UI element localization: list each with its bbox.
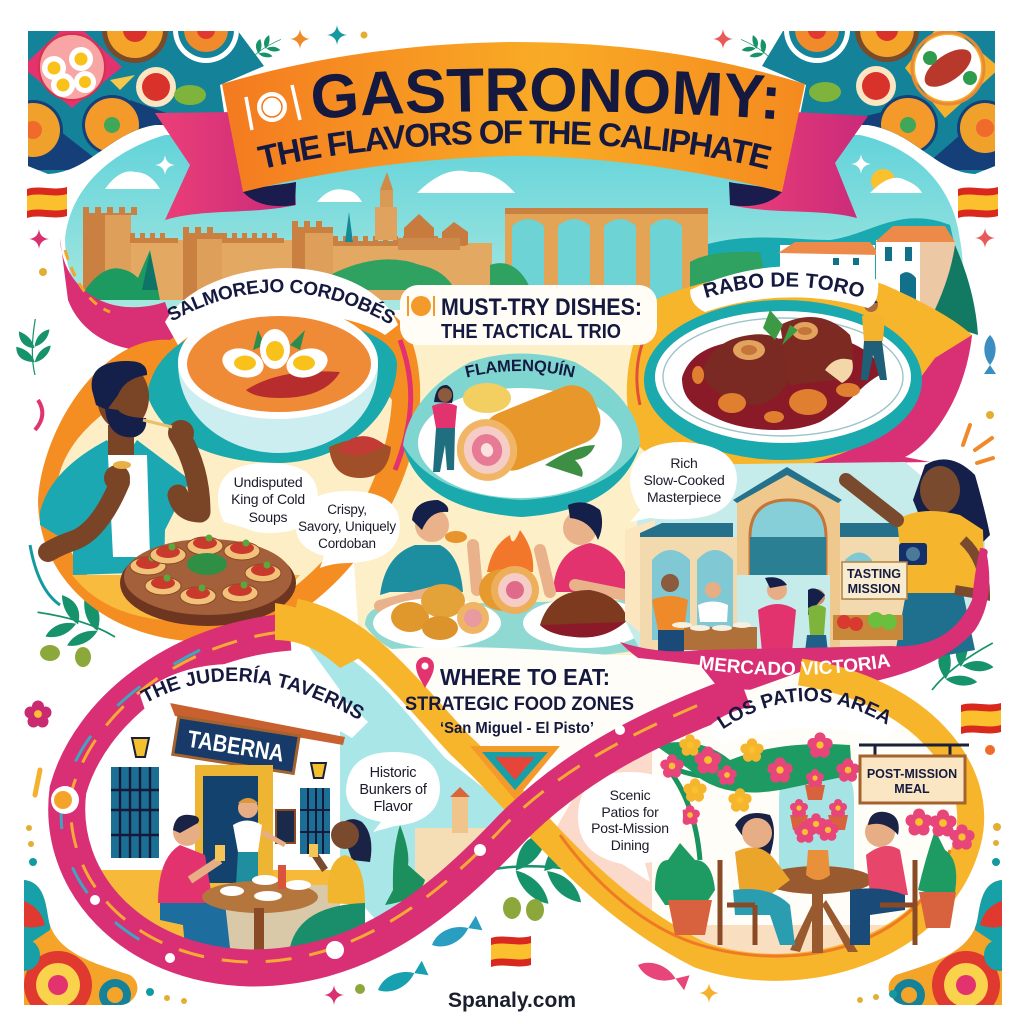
sky [65, 135, 963, 310]
callout [296, 491, 400, 568]
plate [655, 311, 911, 443]
icon: plate [408, 296, 434, 316]
soup [187, 316, 371, 412]
icon: plate and cutlery [246, 85, 300, 130]
man at table [158, 815, 230, 948]
panel: bottom-left corner tiles [24, 880, 138, 1005]
callout: Cordoban [318, 536, 376, 551]
man left [380, 500, 477, 606]
yellow ribbon [627, 272, 972, 467]
man eating [40, 361, 200, 575]
title banner: GASTRONOMY: [313, 68, 776, 119]
icon: grilled meat plate [912, 32, 984, 104]
vase and flowers [794, 813, 839, 880]
callout: Patios for [601, 804, 659, 820]
panel: where-to-eat backing [378, 647, 720, 760]
oxtail stew [682, 310, 880, 430]
potted plant right [906, 808, 975, 928]
Los Patios Area label: LOS PATIOS AREA [716, 688, 889, 729]
eggs and ham [219, 329, 340, 398]
green hills [85, 250, 160, 300]
taberna sign: TABERNA [186, 726, 286, 768]
decorative flags [27, 187, 1001, 967]
table [202, 865, 318, 950]
panel: Mercado Victoria [625, 459, 990, 668]
left tail [155, 112, 296, 220]
Mercado Victoria label: MERCADO VICTORIA [700, 654, 890, 676]
panel: interiors of the lower loops [67, 634, 971, 968]
heading: where to eat [405, 657, 634, 737]
orange ribbon [38, 304, 420, 642]
parsley [545, 445, 595, 477]
heading: where to eat: WHERE TO EAT: [440, 664, 610, 690]
footer: Spanaly.com [448, 989, 576, 1012]
panel: bottom-right patio scene [578, 732, 975, 953]
right tail [730, 112, 868, 218]
panel: city skyline scene [65, 135, 978, 335]
flower vines [655, 732, 860, 860]
sign [859, 745, 969, 803]
callout: Soups [249, 509, 288, 525]
heading: must-try dishes: THE TACTICAL TRIO [441, 321, 621, 343]
label: RABO DE TORO [703, 272, 864, 298]
panel: Rabo de Toro loop [626, 266, 972, 464]
callout: Bunkers of [359, 782, 428, 798]
sign: MEAL [894, 782, 930, 796]
callout: King of Cold [231, 491, 305, 507]
pink infinity ribbon [51, 632, 745, 968]
label: SALMOREJO CORDOBÉS [168, 279, 395, 324]
doorway [195, 765, 273, 883]
market stall [683, 627, 757, 650]
panel: bottom-right corner tiles [888, 880, 1002, 1005]
callout: Crispy, [327, 502, 367, 517]
chalkboard [276, 810, 295, 843]
small ham dish [329, 436, 391, 478]
callout: slow-cooked [630, 442, 737, 522]
callout: Flavor [373, 799, 413, 815]
teal ring [644, 300, 922, 460]
title banner [155, 42, 868, 220]
panel: bottom-left tavern scene [100, 703, 500, 950]
callout: Post-Mission [591, 820, 669, 836]
panel: must-try background [350, 320, 660, 655]
label [690, 266, 878, 312]
plate of croquettes [373, 584, 501, 648]
barred window left [111, 767, 159, 858]
white houses [778, 226, 955, 310]
tavern roof [170, 703, 345, 745]
callout: Scenic [610, 787, 651, 803]
panel: top-left corner tiles [28, 31, 264, 174]
callout [346, 752, 440, 832]
woman guide with camera [846, 459, 990, 665]
market building [640, 467, 907, 650]
heading: where to eat: STRATEGIC FOOD ZONES [405, 693, 634, 715]
small waiter figure [861, 298, 887, 380]
woman diner [720, 813, 795, 945]
heading: must-try dishes: MUST-TRY DISHES: [441, 294, 642, 321]
lanterns [132, 738, 326, 778]
castle walls [130, 240, 492, 300]
distant castle [415, 787, 500, 885]
plate of stew [523, 590, 647, 648]
vegetable stall [833, 612, 903, 640]
panel: top-right corner tiles [762, 31, 995, 174]
panel: Flamenquín plate [403, 354, 640, 517]
label [165, 268, 398, 345]
pink ribbon blade [810, 335, 972, 464]
tasting mission sign [842, 562, 907, 599]
title banner: THE FLAVORS OF THE CALIPHATE [256, 120, 772, 170]
panel: friends with food [365, 500, 648, 661]
woman right [540, 502, 630, 595]
callout: slow-cooked: Masterpiece [647, 489, 721, 505]
market visitors [652, 574, 828, 668]
label: FLAMENQUÍN [465, 360, 575, 378]
banner body [222, 42, 805, 192]
icon: map pin [416, 657, 434, 688]
trees right [930, 245, 978, 335]
interior [56, 330, 392, 622]
right teal hills [690, 218, 965, 310]
tasting mission sign: TASTING [847, 567, 901, 581]
Mercado Victoria ribbon [620, 548, 989, 692]
teal behind bowl [147, 318, 397, 463]
callout [578, 772, 683, 882]
tapas platter [120, 534, 296, 626]
callout: Dining [611, 837, 649, 853]
center roll [479, 566, 539, 614]
arch [779, 760, 854, 880]
decorative triangle motif [470, 746, 560, 800]
yellow infinity ribbon [295, 612, 971, 967]
aqueduct [505, 208, 708, 300]
sign: POST-MISSION [867, 767, 957, 781]
callout: slow-cooked: Rich [670, 455, 698, 471]
flame [487, 530, 533, 572]
woman figure [432, 385, 457, 472]
callout: Undisputed [234, 474, 302, 490]
panel: Salmorejo loop [38, 268, 420, 641]
panel: left pink ribbon with decor [60, 238, 180, 351]
tavern wall base [100, 870, 340, 950]
yellow ribbon overlap at crossing [275, 603, 365, 668]
taberna sign [173, 717, 299, 773]
The Juderia Taverns label: THE JUDERÍA TAVERNS [140, 666, 364, 718]
heading: must-try dishes [400, 285, 657, 345]
tasting mission sign: MISSION [848, 582, 900, 596]
bowl [178, 365, 378, 453]
table top [72, 575, 300, 622]
clouds [105, 154, 922, 202]
waiter [233, 798, 285, 885]
barred window right [300, 788, 330, 854]
hanging pots [790, 769, 848, 830]
callout: Historic [370, 765, 416, 781]
cypress trees [385, 825, 425, 905]
woman at table [290, 819, 371, 947]
callout [218, 463, 318, 533]
potted plant left [655, 843, 715, 935]
heading: where to eat: ‘San Miguel - El Pisto’ [440, 720, 594, 737]
man diner [850, 812, 915, 945]
cathedral [345, 172, 468, 250]
icon: egg plate [28, 31, 122, 108]
callout: Savory, Uniquely [298, 519, 396, 534]
callout: slow-cooked: Slow-Cooked [643, 472, 725, 488]
fried roll [448, 377, 608, 490]
table [763, 866, 873, 953]
